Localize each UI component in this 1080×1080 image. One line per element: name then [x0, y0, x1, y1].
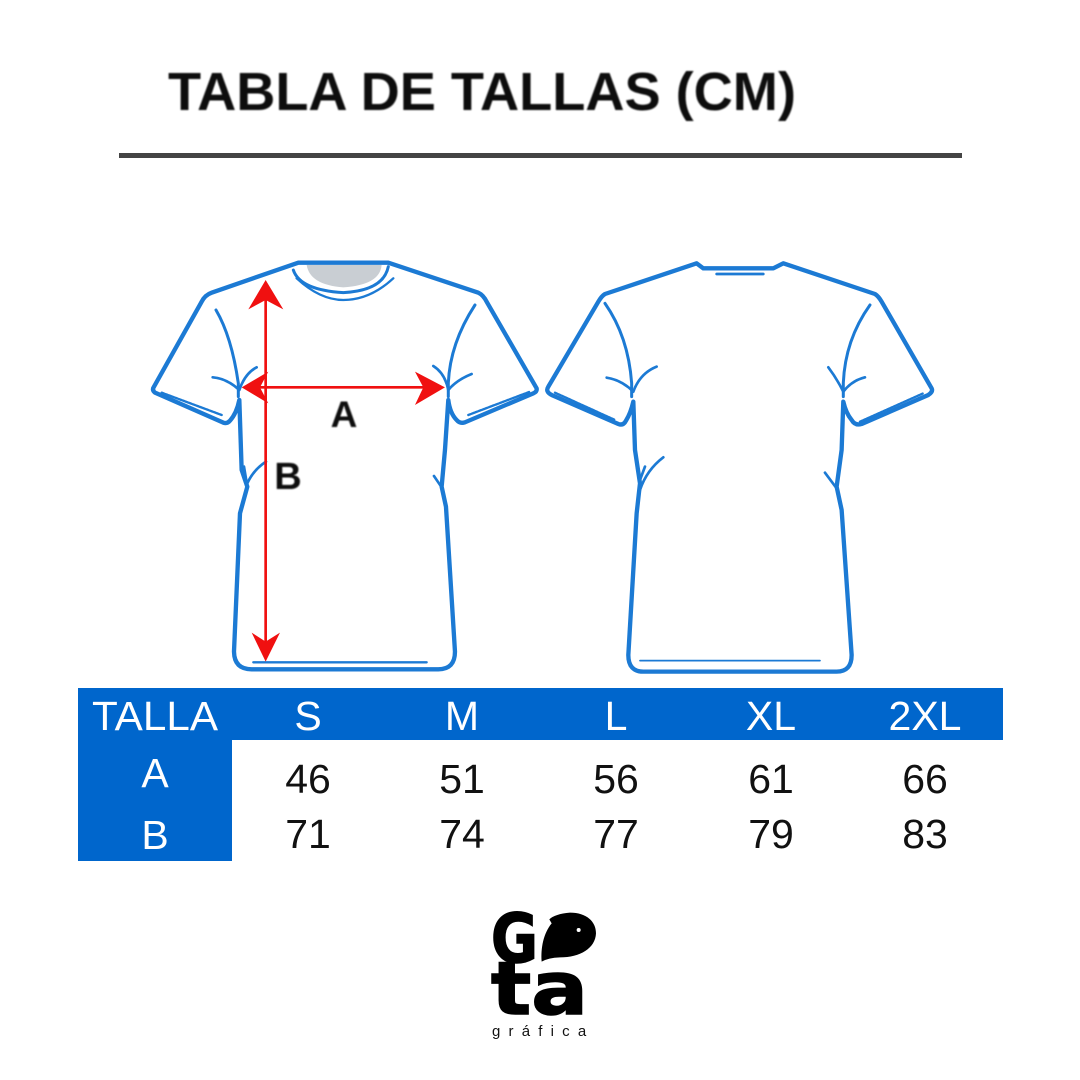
- table row labels: B: [141, 812, 169, 858]
- arrow: measurement A horizontal: [242, 372, 445, 405]
- table row B values: 79: [748, 811, 794, 857]
- logo wordmark G: G: [491, 900, 538, 979]
- table header row: TALLA: [92, 693, 219, 739]
- logo: Gota gráfica: [491, 900, 596, 1040]
- icon: front t-shirt outline: [153, 263, 537, 669]
- label A: A: [331, 394, 357, 435]
- table header row: [78, 688, 1003, 740]
- table row A values: 51: [439, 756, 485, 802]
- logo wordmark ta: ta: [491, 947, 588, 1032]
- table row A values: 61: [748, 756, 794, 802]
- icon: fish-shaped drop: [541, 913, 596, 962]
- icon: back t-shirt outline: [547, 263, 932, 672]
- table row A values: 46: [285, 756, 331, 802]
- table header row: L: [605, 693, 627, 739]
- table header row: M: [445, 693, 479, 739]
- front t-shirt diagram with measurement arrows: [153, 263, 537, 669]
- table row labels: [78, 740, 232, 861]
- table row B values: 77: [593, 811, 639, 857]
- table row B values: [285, 811, 948, 857]
- title: TABLA DE TALLAS (CM): [168, 62, 796, 122]
- table row B values: 71: [285, 811, 331, 857]
- table row A values: [285, 756, 948, 802]
- table row labels: A: [141, 750, 169, 796]
- table header row: 2XL: [889, 693, 961, 739]
- size table: [78, 688, 1003, 861]
- logo tagline: gráfica: [492, 1023, 594, 1040]
- table row A values: 56: [593, 756, 639, 802]
- table header row: S: [294, 693, 322, 739]
- table row B values: 83: [902, 811, 948, 857]
- table header row: XL: [746, 693, 796, 739]
- table row B values: 74: [439, 811, 485, 857]
- table row A values: 66: [902, 756, 948, 802]
- arrow: measurement B vertical: [248, 280, 283, 662]
- label B: B: [274, 456, 302, 498]
